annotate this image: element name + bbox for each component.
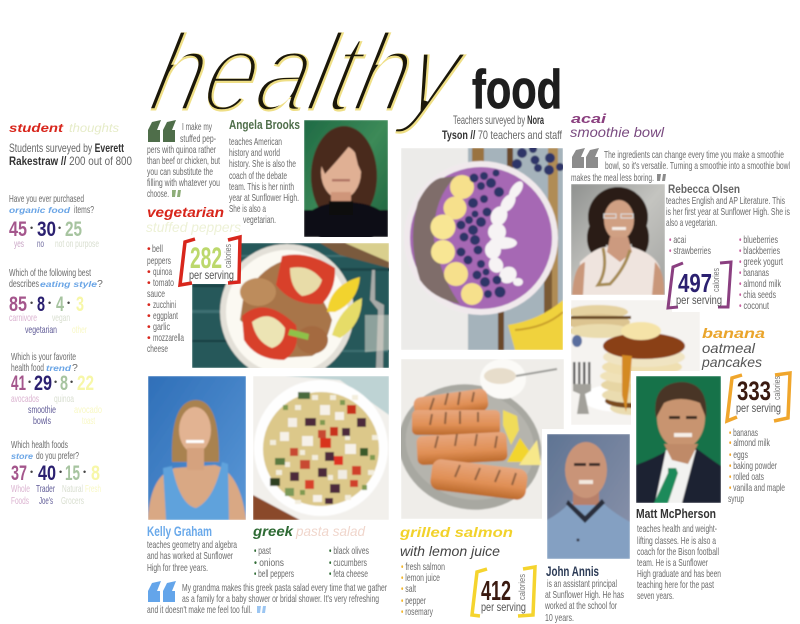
bio: Matt McPherson: coach for the Bison football <box>637 546 719 558</box>
photo: Matt McPherson <box>631 371 726 508</box>
question: health food trend: smoothie <box>28 404 56 416</box>
quote: Rebecca Olsen: makes the meal less boring. <box>571 172 654 184</box>
quote: Rebecca Olsen <box>571 149 790 184</box>
question: health food store: Grocers <box>61 495 84 507</box>
ingredients: acai smoothie bowl: • greek yogurt <box>739 256 783 268</box>
heading: banana oatmeal pancakes: banana <box>702 326 766 341</box>
bio: Rebecca Olsen <box>666 195 790 229</box>
calorie callout: 412: 412 <box>481 575 511 606</box>
question: organic food: 45 <box>9 218 27 241</box>
ingredients: acai smoothie bowl: • strawberries <box>669 245 711 257</box>
bio: Angela Brooks: coach of the debate <box>229 170 287 182</box>
question: eating style: 8 <box>37 293 45 316</box>
ingredients: acai smoothie bowl: • blueberries <box>739 234 778 246</box>
icon: closing quote blue <box>257 606 266 613</box>
calorie callout: 412 <box>472 567 535 616</box>
calorie callout: 282: 282 <box>190 242 222 275</box>
ingredients: grilled salmon: • pepper <box>401 595 426 607</box>
question: health food store: Whole <box>11 483 30 495</box>
ingredients: greek pasta salad: • cucumbers <box>329 557 367 569</box>
ingredients: stuffed peppers: • <box>147 321 151 333</box>
ingredients: greek pasta salad: • onions <box>254 557 284 569</box>
heading: banana oatmeal pancakes: oatmeal <box>702 340 756 356</box>
ingredients: greek pasta salad <box>254 545 369 580</box>
ingredients: grilled salmon: • lemon juice <box>401 572 440 584</box>
bio: Angela Brooks: history and world <box>229 147 280 159</box>
question: eating style: other <box>72 324 87 336</box>
photo: Angela Brooks <box>304 120 388 242</box>
icon: opening quote green <box>148 120 176 142</box>
panel: acai smoothie bowl <box>570 112 790 312</box>
name: John Annis: John Annis <box>546 563 599 579</box>
heading: greek pasta salad: pasta salad <box>295 523 366 539</box>
question: organic food: not on purpose <box>55 238 99 250</box>
quote: Angela Brooks: than beef or chicken, but <box>147 155 220 167</box>
quote: Kelly Graham: My grandma makes this greek pasta salad every time that we gather <box>182 582 387 594</box>
ingredients: stuffed peppers: • <box>147 310 151 322</box>
ingredients: stuffed peppers: peppers <box>147 255 171 267</box>
heading: student thoughts <box>9 123 119 135</box>
question: health food store: Natural <box>62 483 83 495</box>
question: organic food <box>9 193 99 250</box>
bio: Kelly Graham: and has worked at Sunflower <box>147 550 233 562</box>
ingredients: stuffed peppers: zucchini <box>153 299 176 311</box>
ingredients: banana oatmeal pancakes: • rolled oats <box>729 471 764 483</box>
question: health food store: 15 <box>65 462 80 485</box>
bio: Rebecca Olsen: also a vegetarian. <box>666 217 717 229</box>
question: eating style: vegetarian <box>25 324 57 336</box>
bio: Matt McPherson: teaching here for the past <box>637 579 714 591</box>
question: eating style: • <box>67 298 70 308</box>
bio: Matt McPherson: team. He is a Sunflower <box>637 557 708 569</box>
heading: banana oatmeal pancakes <box>701 326 766 370</box>
question: health food trend: 8 <box>60 372 68 395</box>
heading: grilled salmon: grilled salmon <box>399 525 513 540</box>
ingredients: acai smoothie bowl: • chia seeds <box>739 289 776 301</box>
question: health food store: 37 <box>11 462 27 485</box>
teacher survey credit: Teachers surveyed by Nora <box>453 113 544 127</box>
heading: with lemon juice: with lemon juice <box>400 543 500 559</box>
photo: Rebecca Olsen <box>571 184 665 295</box>
title: food: food <box>472 58 562 120</box>
ingredients: stuffed peppers: • <box>147 277 151 289</box>
student survey credit: Rakestraw // 200 out of 800 <box>9 154 132 168</box>
bio: Angela Brooks: teaches American <box>229 136 282 148</box>
heading: greek pasta salad: greek <box>252 523 294 539</box>
question: health food trend: trend <box>46 363 72 373</box>
quote: Angela Brooks: choose. <box>147 188 169 200</box>
ingredients: banana oatmeal pancakes: • bananas <box>729 427 758 439</box>
question: eating style: carnivore <box>9 312 37 324</box>
panel: grilled salmon photo <box>401 359 564 519</box>
heading: vegetarian: vegetarian <box>147 205 224 220</box>
ingredients: grilled salmon <box>401 561 445 618</box>
question: eating style: 4 <box>56 293 64 316</box>
question: organic food: • <box>30 223 33 233</box>
ingredients: banana oatmeal pancakes <box>728 427 785 505</box>
quote: Angela Brooks: filling with whatever you <box>147 177 220 189</box>
ingredients: banana oatmeal pancakes: • baking powder <box>729 460 777 472</box>
ingredients: acai smoothie bowl: • coconut <box>739 300 769 312</box>
calorie callout: 412: per serving <box>481 600 526 614</box>
question: health food store: • <box>83 467 86 477</box>
question: eating style: 85 <box>9 293 27 316</box>
calorie callout: 412: calories <box>517 574 527 600</box>
question: organic food: 25 <box>65 218 82 241</box>
name: Angela Brooks: Angela Brooks <box>229 117 300 132</box>
bio: Angela Brooks: year at Sunflower High. <box>229 192 299 204</box>
title: healthy: healthy <box>141 11 479 137</box>
question: health food trend: • <box>70 377 73 387</box>
bio: Angela Brooks: vegetarian. <box>243 214 276 226</box>
question: eating style: 3 <box>76 293 84 316</box>
bio: Kelly Graham: teaches geometry and algebra <box>147 539 237 551</box>
ingredients: stuffed peppers: • <box>147 243 151 255</box>
question: health food store: Fresh <box>85 483 101 495</box>
ingredients: greek pasta salad: • past <box>254 545 271 557</box>
question: eating style: • <box>30 298 33 308</box>
question: organic food: 30 <box>37 218 56 241</box>
name: Rebecca Olsen: Rebecca Olsen <box>668 184 740 196</box>
calorie callout: 282: per serving <box>189 268 234 282</box>
ingredients: acai smoothie bowl: • blackberries <box>739 245 780 257</box>
ingredients: greek pasta salad: • black olives <box>329 545 369 557</box>
question: health food trend: Which is your favorite <box>11 351 76 363</box>
question: health food store <box>11 439 101 507</box>
bio: John Annis <box>544 578 624 624</box>
quote: Angela Brooks: pers with quinoa rather <box>147 144 216 156</box>
icon: opening quote blue <box>148 581 176 602</box>
question: health food trend: 22 <box>77 372 94 395</box>
ingredients: stuffed peppers: • <box>147 266 151 278</box>
question: organic food: yes <box>14 238 24 250</box>
bio: Kelly Graham <box>147 539 237 574</box>
calorie callout: 497 <box>668 262 732 312</box>
question: health food store: Foods <box>11 495 29 507</box>
quote: Angela Brooks: stuffed pep- <box>180 133 216 145</box>
bio: Matt McPherson <box>637 523 721 602</box>
ingredients: stuffed peppers: bell <box>152 243 163 255</box>
question: organic food: • <box>58 223 61 233</box>
quote: Kelly Graham: as a family for a baby shower or bridal shower. It's very refreshing <box>182 593 379 605</box>
question: health food trend: health food <box>11 362 44 374</box>
ingredients: stuffed peppers: • <box>147 299 151 311</box>
quote: Angela Brooks: you can substitute the <box>147 166 213 178</box>
question: health food store: • <box>30 467 33 477</box>
question: health food store: 8 <box>91 462 100 485</box>
ingredients: banana oatmeal pancakes: • eggs <box>729 449 748 461</box>
photo: Kelly Graham <box>148 376 246 520</box>
photo: stuffed peppers <box>192 243 390 380</box>
heading: student thoughts: thoughts <box>69 123 119 135</box>
bio: John Annis: at Sunflower High. He has <box>545 589 624 601</box>
question: health food trend: ? <box>72 362 78 374</box>
name: Kelly Graham: Kelly Graham <box>147 523 212 539</box>
question: health food trend: avocado <box>74 404 102 416</box>
bio: Matt McPherson: lifting classes. He is also a <box>637 535 716 547</box>
bio: John Annis: is an assistant principal <box>547 578 617 590</box>
ingredients: stuffed peppers <box>147 243 184 355</box>
calorie callout: 282 <box>180 237 240 285</box>
bio: Angela Brooks: She is also a <box>229 203 266 215</box>
ingredients: banana oatmeal pancakes: syrup <box>728 493 744 505</box>
ingredients: acai smoothie bowl: • acai <box>669 234 686 246</box>
question: health food trend: • <box>28 377 31 387</box>
title: healthy: healthy <box>140 10 478 136</box>
photo: John Annis <box>542 429 635 564</box>
question: health food store: store <box>11 451 33 461</box>
question: eating style: • <box>48 298 51 308</box>
question: health food store: do you prefer? <box>36 450 79 462</box>
question: eating style: vegan <box>52 312 70 324</box>
ingredients: stuffed peppers: cheese <box>147 343 168 355</box>
icon: opening quote grey <box>572 148 599 168</box>
question: health food store: • <box>59 467 62 477</box>
bio: Matt McPherson: teaches health and weight- <box>637 523 717 535</box>
ingredients: stuffed peppers: garlic <box>153 321 170 333</box>
question: health food store: 40 <box>38 462 56 485</box>
panel: banana oatmeal pancakes photo <box>566 300 700 425</box>
ingredients: grilled salmon: • salt <box>401 583 416 595</box>
calorie callout: 333 <box>727 373 790 421</box>
heading: acai: acai <box>571 112 607 126</box>
question: health food trend: 29 <box>34 372 52 395</box>
bio: Angela Brooks: history. She is also the <box>229 158 296 170</box>
icon: closing quote grey <box>657 174 666 181</box>
student survey credit <box>9 141 132 168</box>
teacher survey credit <box>442 113 562 142</box>
question: organic food: organic food <box>9 205 71 215</box>
bio: Matt McPherson: High graduate and has been <box>637 568 721 580</box>
question: health food trend: 41 <box>11 372 26 395</box>
ingredients: stuffed peppers: eggplant <box>153 310 178 322</box>
question: health food trend: toast <box>82 415 95 427</box>
ingredients: stuffed peppers: mozzarella <box>153 332 184 344</box>
calorie callout: 333: 333 <box>737 376 771 406</box>
teacher survey credit: Tyson // 70 teachers and staff <box>442 128 562 142</box>
heading: greek pasta salad <box>252 523 366 539</box>
calorie callout: 497: calories <box>711 268 721 292</box>
question: eating style <box>9 267 103 336</box>
bio: John Annis: worked at the school for <box>544 600 617 612</box>
question: health food trend: • <box>54 377 57 387</box>
heading: student thoughts: student <box>9 123 65 135</box>
icon: closing quote green <box>172 190 181 197</box>
name: Matt McPherson: Matt McPherson <box>636 506 716 521</box>
panel: greek pasta salad <box>147 376 389 616</box>
bio: Matt McPherson: seven years. <box>637 590 674 602</box>
question: organic food: Have you ever purchased <box>9 193 84 205</box>
question: eating style: ? <box>97 278 103 290</box>
question: health food trend: avocados <box>11 393 39 405</box>
calorie callout: 497: per serving <box>676 293 722 307</box>
heading: smoothie bowl: smoothie bowl <box>570 124 665 140</box>
bio: John Annis: 10 years. <box>545 612 574 624</box>
calorie callout: 282: calories <box>223 244 233 268</box>
student survey credit: Students surveyed by Everett <box>9 141 124 155</box>
panel: acai smoothie bowl photo <box>401 145 564 350</box>
quote: Angela Brooks <box>147 121 220 200</box>
ingredients: greek pasta salad: • bell peppers <box>254 568 294 580</box>
ingredients: stuffed peppers: quinoa <box>153 266 172 278</box>
ingredients: stuffed peppers: tomato <box>153 277 174 289</box>
question: eating style: eating style <box>40 279 97 289</box>
ingredients: grilled salmon: • fresh salmon <box>401 561 445 573</box>
photo: greek pasta salad <box>253 376 389 520</box>
question: organic food: no <box>37 238 44 250</box>
question: health food store: Joe's <box>39 495 53 507</box>
ingredients: stuffed peppers: sauce <box>147 288 165 300</box>
ingredients: acai smoothie bowl: • almond milk <box>739 278 781 290</box>
question: health food store: Which health foods <box>11 439 68 451</box>
quote: Kelly Graham <box>147 582 387 616</box>
question: organic food: items? <box>74 204 94 216</box>
panel: student thoughts survey <box>9 123 132 507</box>
calorie callout: 497: 497 <box>678 268 712 298</box>
heading: stuffed peppers: stuffed peppers <box>146 219 241 235</box>
question: health food trend: quinoa <box>54 393 74 405</box>
quote: Kelly Graham: and it doesn't make me feel too full. <box>147 604 252 616</box>
ingredients: acai smoothie bowl <box>669 234 783 312</box>
ingredients: acai smoothie bowl: • bananas <box>739 267 769 279</box>
bio: Angela Brooks <box>229 136 299 226</box>
ingredients: greek pasta salad: • feta cheese <box>329 568 368 580</box>
ingredients: grilled salmon: • rosemary <box>401 606 433 618</box>
question: health food store: Trader <box>36 483 55 495</box>
ingredients: stuffed peppers: • <box>147 332 151 344</box>
question: eating style: describes <box>9 278 39 290</box>
question: health food trend: bowls <box>33 415 51 427</box>
quote: Angela Brooks: I make my <box>182 121 212 133</box>
bio: Kelly Graham: High for three years. <box>147 562 208 574</box>
bio: Angela Brooks: team. This is her ninth <box>229 181 294 193</box>
calorie callout: 333: per serving <box>736 401 781 415</box>
question: eating style: Which of the following best <box>9 267 91 279</box>
panel: vegetarian stuffed peppers <box>146 117 390 380</box>
question: health food trend <box>11 351 102 427</box>
calorie callout: 333: calories <box>772 376 782 400</box>
ingredients: banana oatmeal pancakes: • almond milk <box>729 437 770 449</box>
heading: banana oatmeal pancakes: pancakes <box>701 354 762 370</box>
